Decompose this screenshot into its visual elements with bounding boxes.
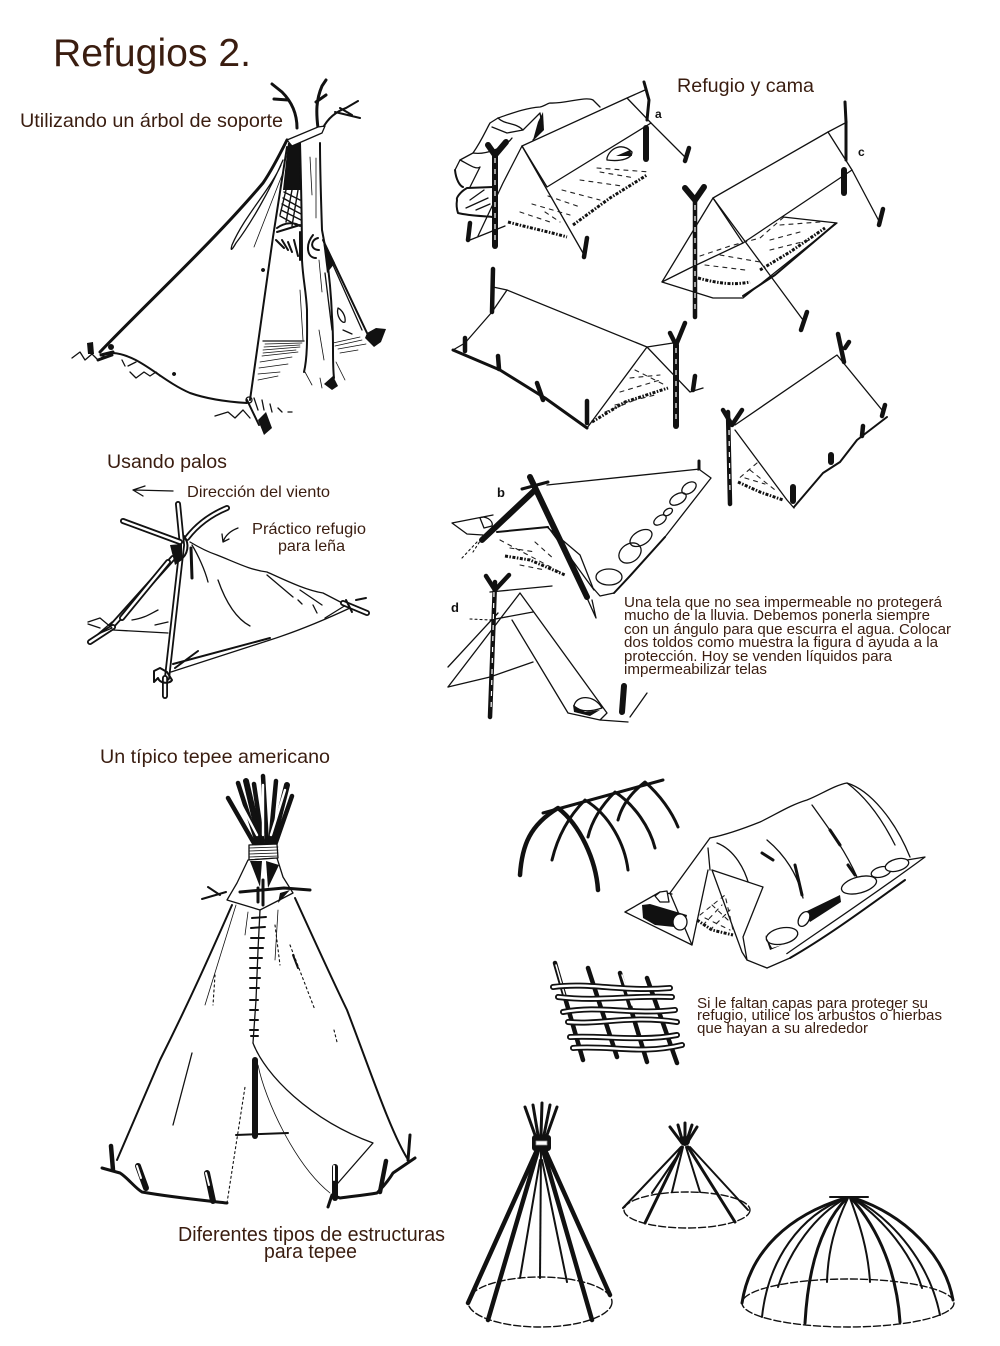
label: structure types: para tepee [264, 1241, 357, 1263]
heading: shelter and bed: Refugio y cama [677, 75, 814, 97]
illustration: tepee [102, 776, 415, 1207]
text block: waterproofing note: con un ángulo para que escurra el agua. Colocar [624, 621, 951, 638]
heading: using poles: Usando palos [107, 452, 227, 473]
illustration: pole tarp shelter [88, 504, 367, 696]
illustration: bent arch frame [520, 780, 678, 890]
heading: tree support: Utilizando un árbol de soporte [20, 110, 283, 132]
text block: waterproofing note: dos toldos como muestra la figura d ayuda a la [624, 634, 939, 651]
illustration: low ridge shelter [723, 334, 887, 508]
illustration: covered tunnel shelter [625, 783, 925, 968]
label d: d [451, 600, 459, 615]
text block: bushes note: refugio, utilice los arbustos o hierbas [697, 1007, 942, 1024]
arrow: wind direction [133, 486, 173, 496]
text block: waterproofing note: mucho de la lluvia. Debemos ponerla siempre [624, 607, 930, 624]
illustration: open shelter [453, 269, 703, 428]
illustration: lean-to a [455, 82, 689, 257]
arrow: points to firewood shelter [222, 528, 238, 542]
label: practical firewood shelter: Práctico refugio [252, 521, 366, 538]
label: practical firewood shelter [252, 521, 366, 555]
illustration: tarp tied to a tree [72, 80, 386, 435]
text block: bushes note [697, 995, 942, 1037]
illustration: small tepee frame [623, 1123, 750, 1228]
label: practical firewood shelter: para leña [278, 538, 345, 555]
label: structure types [178, 1224, 445, 1263]
label: structure types: Diferentes tipos de estructuras [178, 1224, 445, 1246]
label b: b [497, 485, 505, 500]
heading: typical American tepee: Un típico tepee americano [100, 746, 330, 768]
text block: waterproofing note: Una tela que no sea impermeable no protegerá [624, 594, 943, 611]
text block: waterproofing note: impermeabilizar telas [624, 661, 767, 678]
illustration: shelter b with crossed poles [452, 461, 711, 618]
illustration: woven branch mat [553, 963, 682, 1063]
text block: bushes note: que hayan a su alrededor [697, 1020, 868, 1037]
label: wind direction: Dirección del viento [187, 484, 330, 501]
illustration: shelter d with double tarp [448, 575, 647, 722]
title: Refugios 2. [53, 32, 251, 75]
illustration: dome frame [742, 1197, 954, 1327]
text block: waterproofing note [624, 594, 951, 678]
text block: waterproofing note: protección. Hoy se venden líquidos para [624, 648, 893, 665]
illustration: lean-to c [662, 102, 883, 330]
label a: a [655, 107, 662, 121]
illustration: tall tepee frame [468, 1103, 612, 1327]
text block: bushes note: Si le faltan capas para proteger su [697, 995, 928, 1012]
label c: c [858, 145, 865, 159]
